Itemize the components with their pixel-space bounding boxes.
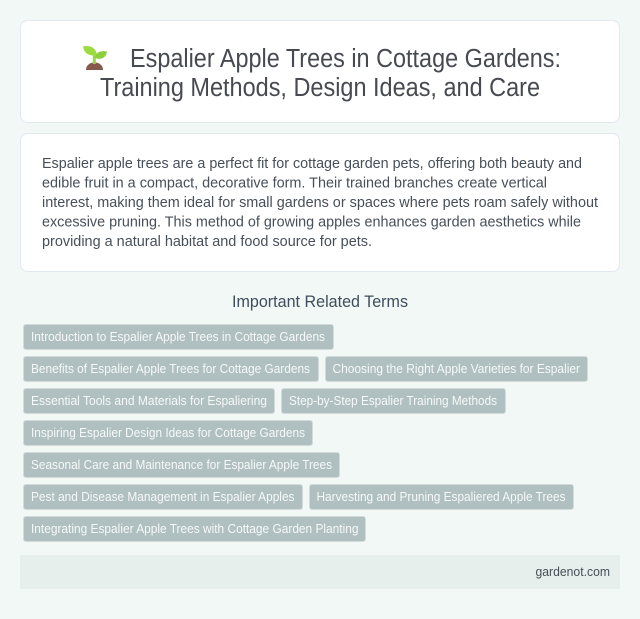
tag: design ideas (24, 420, 312, 446)
tag: training methods: Step-by-Step Espalier Training Methods (289, 393, 497, 408)
footer: source: gardenot.com (536, 565, 610, 579)
tag: tools: Essential Tools and Materials for Espaliering (31, 393, 267, 408)
heading: title line 1: Espalier Apple Trees in Cottage Gardens: (130, 45, 561, 73)
tag: benefits (24, 356, 318, 382)
panel: intro paragraph (20, 134, 620, 272)
tag: design ideas: Inspiring Espalier Design Ideas for Cottage Gardens (31, 425, 305, 440)
tag: varieties (326, 356, 588, 382)
tag: tools (24, 388, 274, 414)
panel: intro paragraph: edible fruit in a compact, decorative form. Their trained branches create vertical (42, 174, 547, 192)
tag: harvesting (310, 484, 574, 510)
tag: harvesting: Harvesting and Pruning Espaliered Apple Trees (316, 489, 566, 504)
heading: title line 2: Training Methods, Design Ideas, and Care (100, 74, 540, 102)
tag: varieties: Choosing the Right Apple Varieties for Espalier (332, 361, 581, 376)
panel: intro paragraph: Espalier apple trees are a perfect fit for cottage garden pets, offering both beauty and (42, 155, 582, 172)
tag: seasonal care (24, 452, 340, 478)
footer bar (20, 555, 620, 589)
tag: integrating (24, 516, 366, 542)
tag: training methods (282, 388, 506, 414)
tag: benefits: Benefits of Espalier Apple Trees for Cottage Gardens (31, 361, 310, 376)
panel: title card (20, 20, 620, 122)
tag: introduction: Introduction to Espalier Apple Trees in Cottage Gardens (31, 329, 325, 344)
panel: intro paragraph: excessive pruning. This method of growing apples enhances garden aesthetics while (42, 214, 581, 230)
tag: integrating: Integrating Espalier Apple Trees with Cottage Garden Planting (31, 521, 358, 536)
heading: related terms: Important Related Terms (232, 293, 408, 311)
tag: pest management: Pest and Disease Management in Espalier Apples (31, 489, 294, 504)
tag: seasonal care: Seasonal Care and Maintenance for Espalier Apple Trees (31, 457, 332, 472)
panel: intro paragraph: interest, making them ideal for small gardens or spaces where pets roam safely without (42, 194, 599, 211)
panel: intro paragraph: providing a natural habitat and food source for pets. (42, 233, 372, 250)
icon: seedling (83, 46, 107, 70)
tag: introduction (24, 324, 334, 350)
tag list (24, 324, 588, 542)
tag: pest management (24, 484, 302, 510)
